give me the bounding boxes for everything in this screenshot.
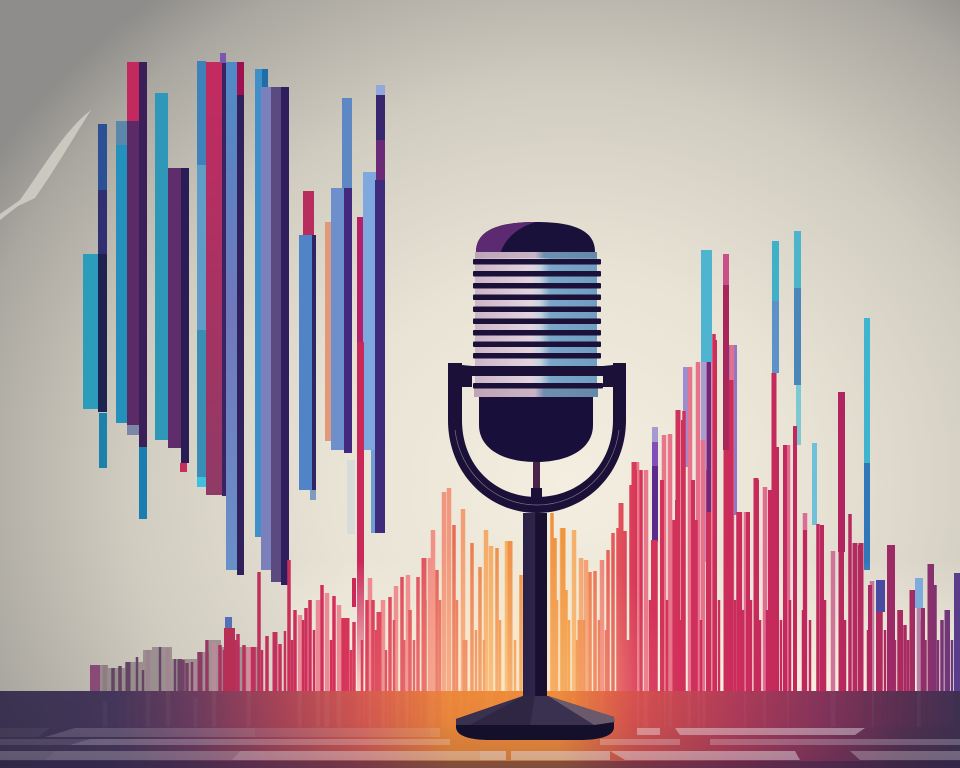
microphone <box>470 222 606 462</box>
microphone neck <box>533 462 540 490</box>
warm light over bar bases <box>340 530 680 691</box>
right-side cyan and blue sound bars <box>652 231 870 570</box>
floor <box>0 691 960 768</box>
grille ribs <box>470 259 606 388</box>
lower sound wave bars <box>90 254 960 691</box>
microphone base <box>456 696 615 740</box>
microphone yoke <box>448 363 626 513</box>
upper-left floating sound bars <box>83 53 385 691</box>
floor planks <box>0 728 960 760</box>
microphone pole <box>523 513 547 697</box>
bottom glow behind lower bars <box>290 560 960 692</box>
microphone joint <box>531 488 542 502</box>
purple highlight on head <box>476 222 536 254</box>
microphone head top <box>476 222 595 256</box>
pale wisp at left edge <box>0 110 91 220</box>
skyline block at lower left <box>90 640 258 691</box>
grille bands <box>474 252 598 397</box>
microphone lower body <box>479 395 593 462</box>
